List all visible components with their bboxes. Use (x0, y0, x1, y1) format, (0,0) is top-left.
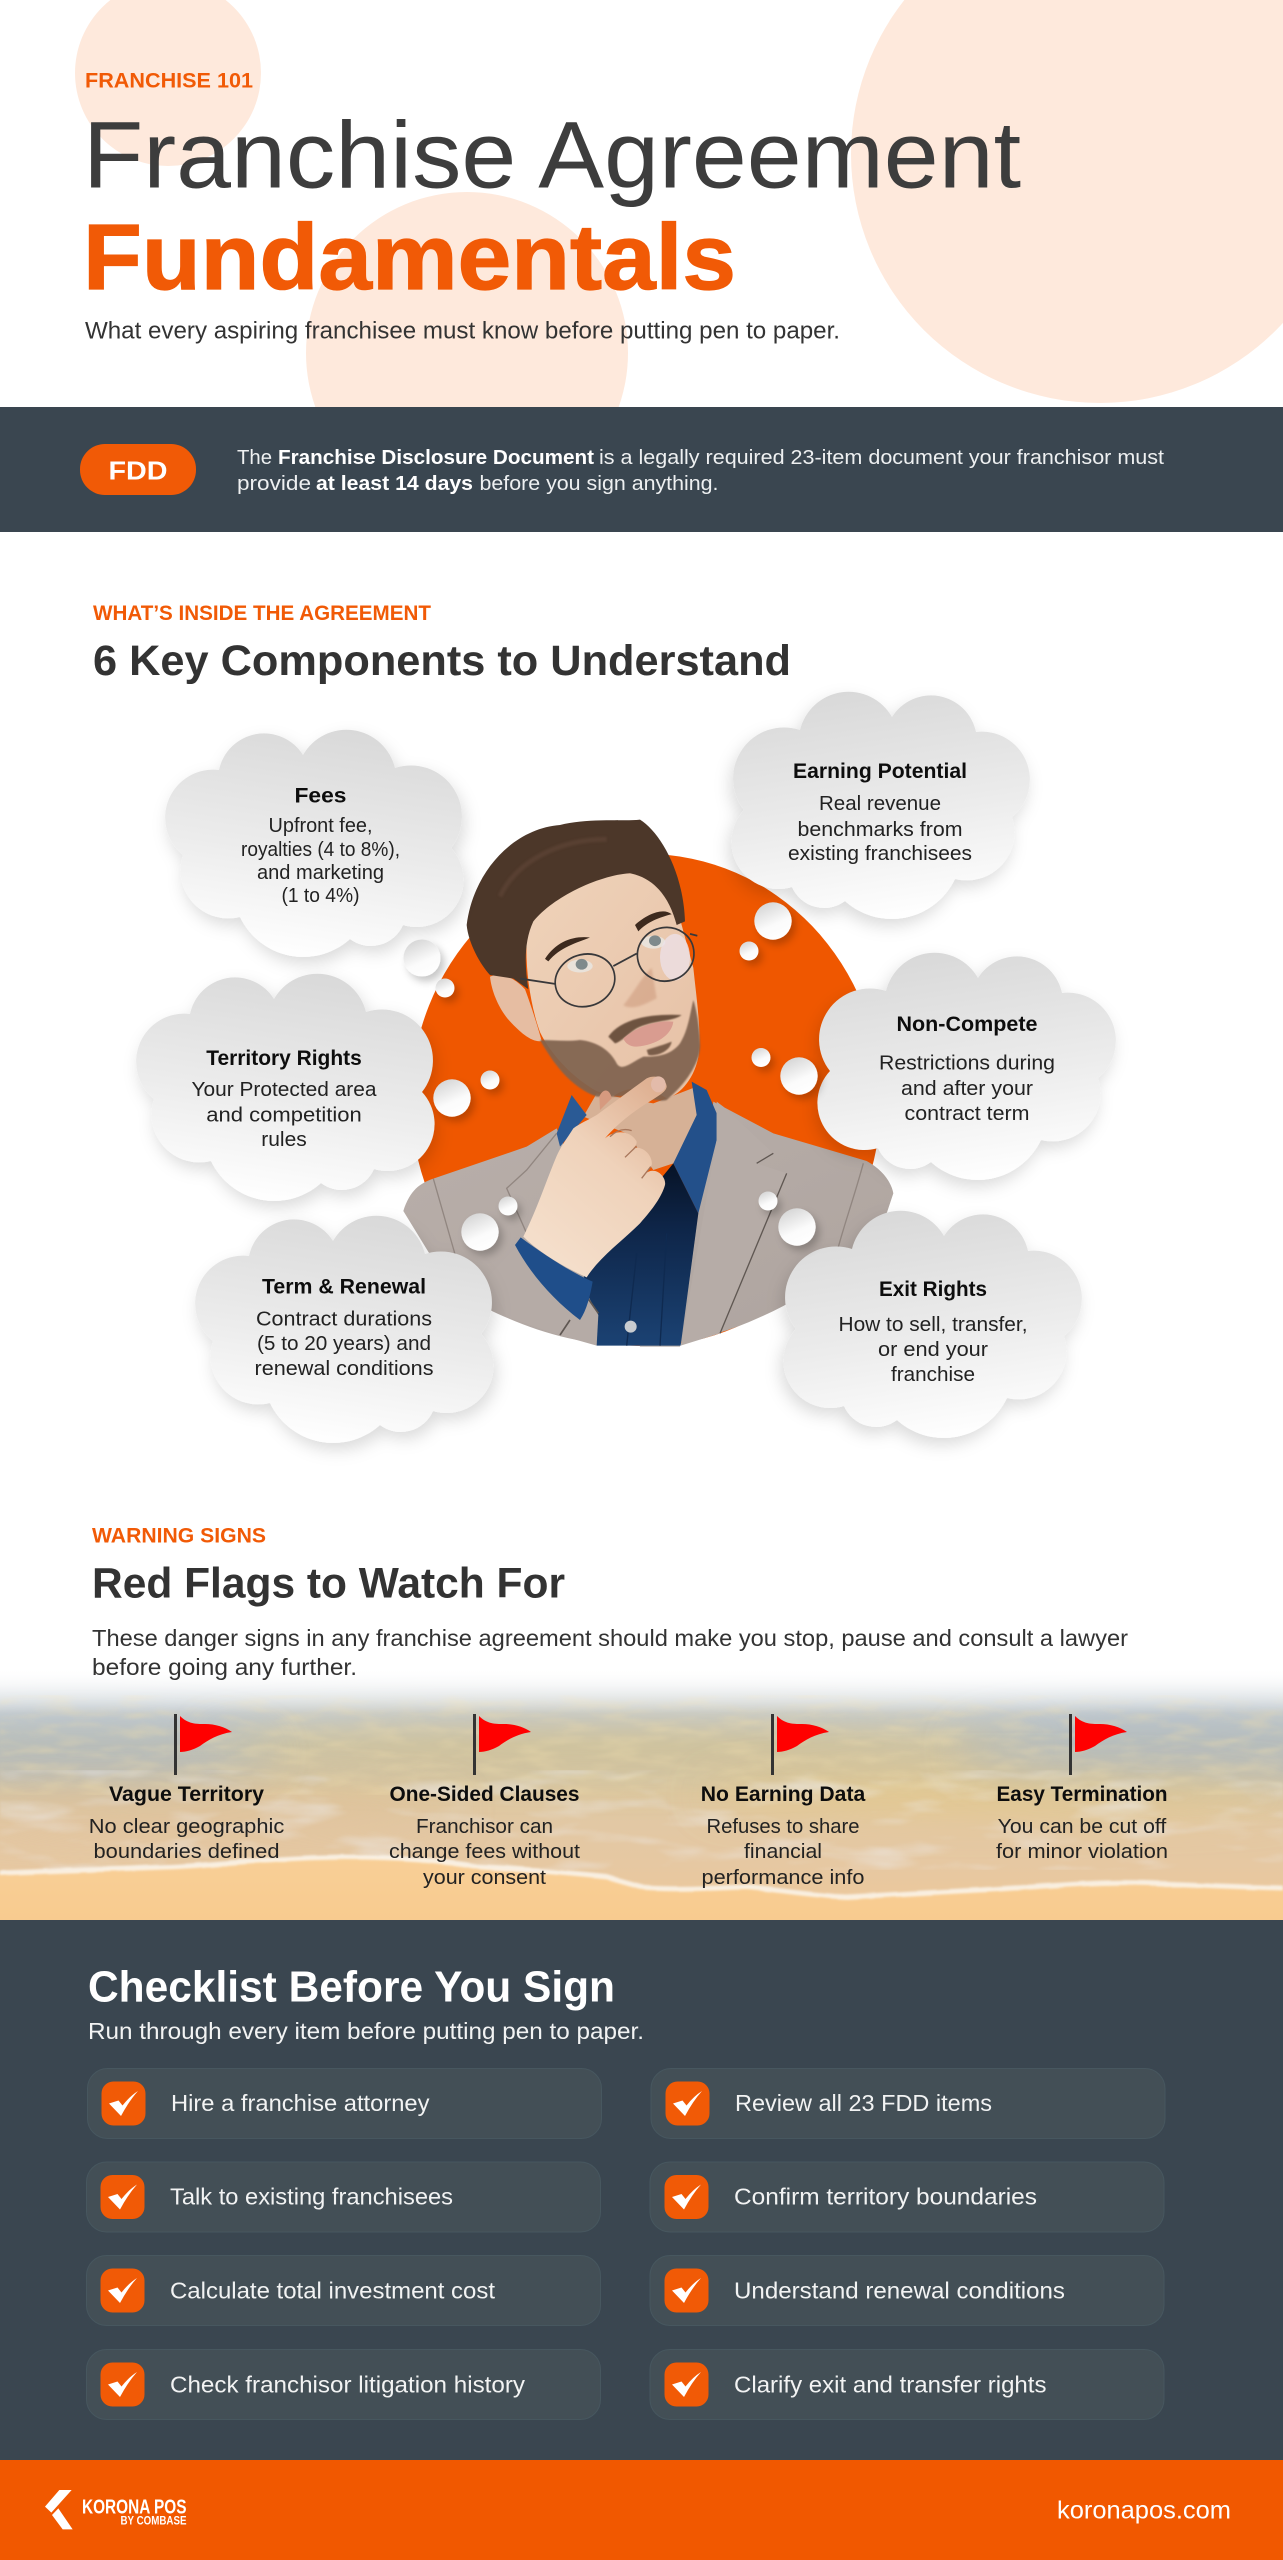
header panel (75, 0, 1283, 514)
red flag: no earning data: Refuses to share (706, 1816, 860, 1838)
cloud: fees: royalties (4 to 8%), (241, 839, 400, 861)
checklist item: litigation (86, 2350, 600, 2420)
cloud: exit rights: How to sell, transfer, (838, 1314, 1028, 1336)
red flag: no earning data (701, 1714, 866, 1889)
cloud: non-compete (817, 953, 1116, 1180)
cloud: term and renewal: Term & Renewal (262, 1276, 426, 1298)
logo: BY COMBASE (120, 2516, 187, 2528)
cloud: earning potential (731, 692, 1030, 919)
eyebrow: WHAT’S INSIDE THE AGREEMENT (93, 602, 431, 625)
checklist item: investment cost (86, 2256, 600, 2326)
red flag: vague territory: No clear geographic (89, 1816, 284, 1838)
red flag: easy termination (996, 1714, 1168, 1863)
red flag: vague territory (89, 1714, 284, 1863)
cloud: term and renewal (195, 1216, 494, 1443)
cloud: fees: and marketing (257, 862, 384, 884)
red flag: easy termination: You can be cut off (998, 1816, 1167, 1838)
cloud: term and renewal: (5 to 20 years) and (257, 1333, 431, 1355)
icon: flag (1069, 1714, 1127, 1775)
icon: flag (771, 1714, 829, 1775)
cloud: territory rights (136, 974, 435, 1201)
eyebrow: WARNING SIGNS (92, 1524, 266, 1548)
title line 2: Fundamentals (83, 205, 736, 309)
FDD description (237, 446, 1164, 495)
cloud: exit rights: Exit Rights (879, 1278, 987, 1301)
checklist item: franchisees (86, 2162, 600, 2232)
checklist item: franchisees: Talk to existing franchisees (170, 2184, 453, 2210)
intro paragraph (92, 1625, 1128, 1680)
thought bubbles (404, 902, 818, 1251)
heading: 6 Key Components to Understand (93, 637, 791, 685)
checklist item: exit rights (650, 2350, 1164, 2420)
red flag: one-sided clauses (389, 1714, 580, 1889)
FDD description: provide (237, 472, 311, 495)
illustration: thinking man (403, 820, 893, 1347)
FDD pill (80, 444, 196, 495)
cloud: term and renewal: renewal conditions (254, 1358, 434, 1380)
cloud: territory rights: and competition (206, 1104, 362, 1126)
section heading: key components (93, 602, 791, 685)
cloud: earning potential: benchmarks from (798, 819, 962, 841)
cloud: earning potential: Earning Potential (793, 760, 967, 783)
red flag: vague territory: boundaries defined (94, 1841, 280, 1863)
cloud: earning potential: existing franchisees (788, 843, 972, 865)
red flag: easy termination: for minor violation (996, 1841, 1168, 1863)
red flag: one-sided clauses: change fees without (389, 1841, 580, 1863)
checklist item: attorney (88, 2068, 602, 2138)
checklist item: renewal: Understand renewal conditions (734, 2278, 1065, 2304)
eyebrow: franchise 101: FRANCHISE 101 (85, 70, 253, 92)
checklist item: FDD items: Review all 23 FDD items (735, 2090, 992, 2116)
FDD description: is a legally required 23-item document your franchisor must (599, 446, 1164, 469)
red flag: no earning data: financial (744, 1841, 822, 1863)
red flag: no earning data: performance info (702, 1867, 864, 1889)
section heading: red flags (92, 1524, 1128, 1680)
FDD description: at least 14 days (316, 472, 473, 495)
checklist item: investment cost: Calculate total investment cost (170, 2278, 496, 2304)
cloud: territory rights: Your Protected area (192, 1079, 377, 1101)
website: koronapos.com (1057, 2496, 1231, 2524)
checklist item: renewal (650, 2256, 1164, 2326)
checklist item: litigation: Check franchisor litigation history (170, 2372, 526, 2398)
heading: Red Flags to Watch For (92, 1560, 565, 1608)
FDD pill: FDD (108, 456, 168, 486)
cloud: territory rights: Territory Rights (206, 1047, 362, 1070)
title line 1: Franchise Agreement (83, 102, 1021, 208)
logo (45, 2490, 187, 2529)
cloud: exit rights: franchise (891, 1364, 975, 1386)
red flag: no earning data: No Earning Data (701, 1783, 866, 1806)
orange circle behind man (411, 854, 881, 1346)
cloud: exit rights: or end your (878, 1339, 988, 1361)
cloud: fees: Upfront fee, (268, 815, 372, 837)
cloud: earning potential: Real revenue (819, 793, 941, 815)
decorative peach circles (75, 0, 1283, 514)
intro paragraph: before going any further. (92, 1654, 357, 1680)
checklist panel (0, 1920, 1283, 2460)
cloud: term and renewal: Contract durations (256, 1308, 432, 1330)
FDD description: The (237, 446, 272, 469)
cloud: non-compete: contract term (904, 1103, 1030, 1125)
checklist item: territory: Confirm territory boundaries (734, 2184, 1037, 2210)
cloud: non-compete: Non-Compete (896, 1013, 1038, 1036)
checklist item: exit rights: Clarify exit and transfer rights (734, 2372, 1046, 2398)
checklist item: FDD items (651, 2068, 1165, 2138)
cloud: non-compete: and after your (901, 1078, 1033, 1100)
checklist heading: Checklist Before You Sign (88, 1962, 615, 2012)
footer (0, 2460, 1283, 2560)
checklist subtitle: Run through every item before putting pen to paper. (88, 2018, 644, 2044)
red flag: easy termination: Easy Termination (996, 1783, 1168, 1806)
red flag: vague territory: Vague Territory (109, 1783, 264, 1806)
cloud: exit rights (783, 1211, 1082, 1438)
checklist item: territory (650, 2162, 1164, 2232)
checklist item: attorney: Hire a franchise attorney (171, 2090, 430, 2116)
icon: flag (174, 1714, 232, 1775)
red flag: one-sided clauses: your consent (423, 1867, 546, 1889)
FDD band (0, 407, 1283, 532)
subtitle: What every aspiring franchisee must know before putting pen to paper. (85, 318, 840, 344)
cloud: fees (165, 730, 464, 957)
icon: flag (473, 1714, 531, 1775)
cloud: territory rights: rules (261, 1129, 307, 1151)
beach background (0, 1668, 1283, 1920)
cloud: fees: (1 to 4%) (282, 885, 360, 907)
red flag: one-sided clauses: One-Sided Clauses (390, 1783, 580, 1806)
intro paragraph: These danger signs in any franchise agreement should make you stop, pause and consult a lawyer (92, 1625, 1128, 1651)
red flag: one-sided clauses: Franchisor can (416, 1816, 553, 1838)
cloud: fees: Fees (294, 784, 346, 808)
FDD description: before you sign anything. (480, 472, 718, 495)
FDD description: Franchise Disclosure Document (278, 446, 594, 469)
cloud: non-compete: Restrictions during (879, 1052, 1055, 1074)
logo: KORONA POS (82, 2496, 186, 2518)
